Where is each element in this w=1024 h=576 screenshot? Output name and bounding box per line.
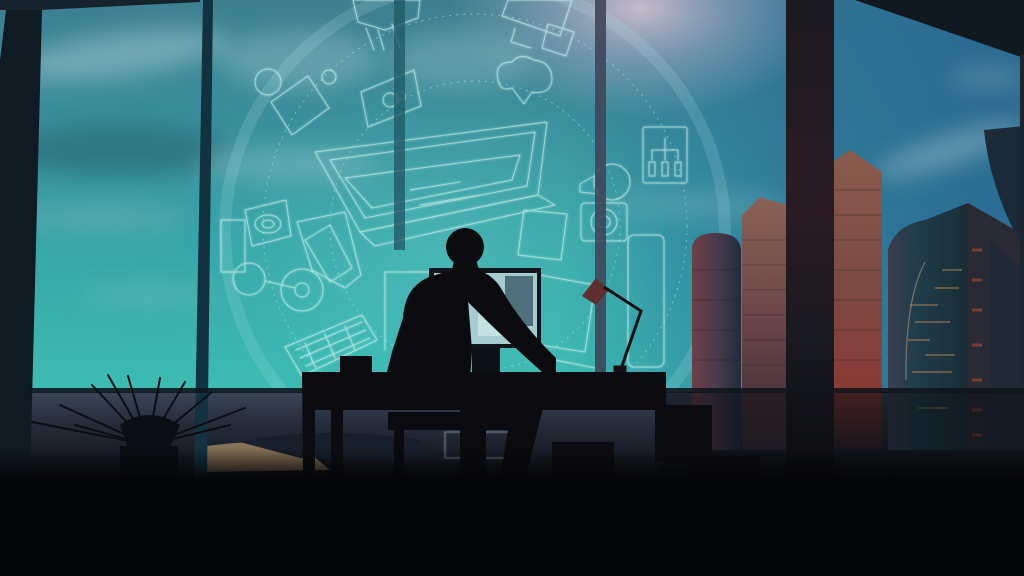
top beam right [855, 0, 1024, 58]
icon: main laptop [315, 122, 555, 246]
tower: curved glass [888, 203, 985, 450]
icon: keyboard [285, 315, 377, 376]
head [446, 228, 484, 266]
tower: mid [742, 197, 790, 450]
city horizon [30, 392, 1024, 482]
floor fade [0, 448, 1024, 480]
sky background [0, 0, 1024, 420]
mullion 2 [394, 0, 405, 250]
desk lamp [582, 278, 641, 372]
top beam left [0, 0, 200, 10]
mullion 3 [595, 0, 606, 372]
holographic ring and orbit [225, 0, 725, 482]
clouds [8, 18, 1024, 303]
tower: tall [832, 150, 882, 450]
monitor [429, 268, 541, 372]
pillar: right [786, 0, 834, 482]
mullion 1 [194, 0, 213, 480]
icon: tablet left [255, 69, 336, 135]
icon: tablet top [353, 0, 420, 50]
icon: settings card [361, 70, 421, 127]
desk [302, 356, 760, 484]
icon: small tablet [518, 210, 567, 260]
torso [385, 260, 480, 380]
pillar: left [0, 10, 42, 480]
icon: cloud [497, 56, 552, 104]
icon: tablet behind monitor [385, 272, 595, 368]
tower: round [692, 233, 741, 450]
sill rail [30, 388, 1024, 393]
dusk shade over lower city [660, 392, 1024, 482]
legs [460, 400, 545, 490]
tower: far right [984, 126, 1024, 250]
chair [388, 412, 505, 484]
icon: dumbbell [233, 263, 323, 311]
icon: left speaker [221, 200, 291, 272]
plant [32, 375, 245, 480]
icon: tablets stack [297, 212, 361, 288]
arm [466, 268, 556, 372]
skyscrapers [692, 126, 1024, 450]
icon: monitor top right [502, 0, 574, 56]
icon: phone right [628, 235, 664, 367]
floor [0, 478, 1024, 576]
icon: bulb and speaker [580, 164, 630, 241]
person silhouette [385, 228, 556, 490]
icon: org chart card [643, 127, 687, 183]
holographic icons [221, 0, 687, 458]
